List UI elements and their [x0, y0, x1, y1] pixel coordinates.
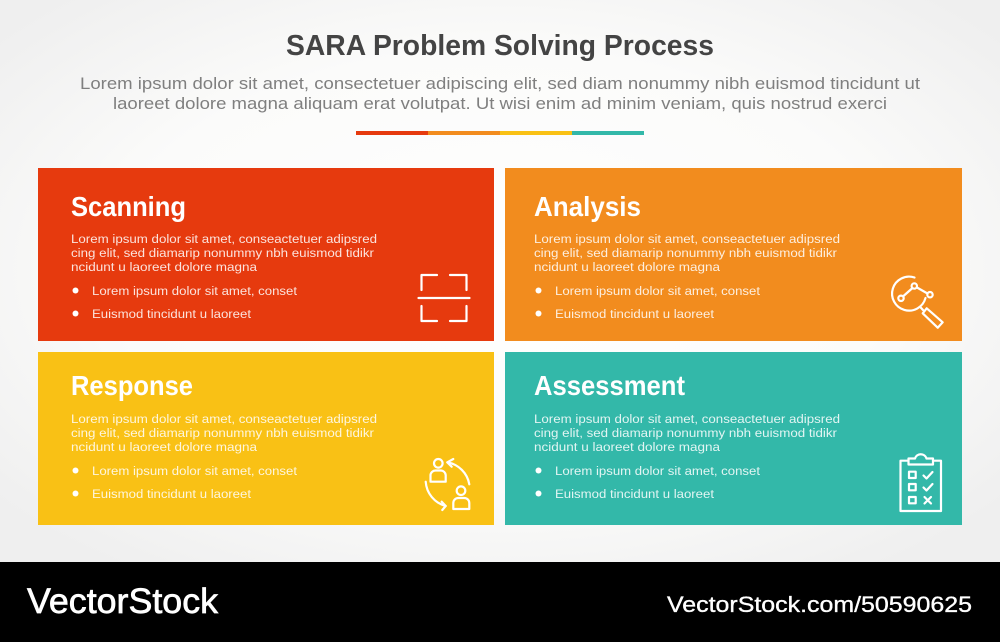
text block: Scanning description: ncidunt u laoreet dolore magna: [71, 260, 257, 274]
icon: magnifier with chart: [892, 277, 943, 328]
title: SARA Problem Solving Process: [286, 30, 714, 62]
bullet list: Scanning: [72, 284, 298, 321]
subtitle: laoreet dolore magna aliquam erat volutpat. Ut wisi enim ad minim veniam, quis nostrud exerci: [113, 95, 887, 113]
bullet list: Scanning: Euismod tincidunt u laoreet: [92, 307, 252, 321]
bullet list: Analysis: [536, 284, 761, 321]
text block: Assessment description: cing elit, sed diamarip nonummy nbh euismod tidikr: [534, 426, 837, 440]
bullet list: Scanning: Lorem ipsum dolor sit amet, conset: [92, 284, 298, 298]
panel: Analysis: [505, 168, 962, 341]
watermark id: VectorStock.com/50590625: [667, 592, 972, 617]
text block: Analysis description: Lorem ipsum dolor sit amet, conseactetuer adipsred: [534, 232, 840, 246]
icon: scan frame: [418, 275, 470, 321]
watermark logo: VectorStock: [27, 582, 219, 621]
heading: Response: Response: [71, 370, 193, 401]
text block: Scanning description: Lorem ipsum dolor sit amet, conseactetuer adipsred: [71, 232, 377, 246]
subtitle: [80, 75, 920, 113]
heading: Analysis: Analysis: [534, 191, 641, 222]
icon: people exchange cycle: [426, 459, 469, 510]
heading: Scanning: Scanning: [71, 191, 186, 222]
bullet list: Assessment: Lorem ipsum dolor sit amet, conset: [555, 464, 761, 478]
bullet list: Response: Lorem ipsum dolor sit amet, conset: [92, 464, 298, 478]
bullet list: Analysis: Lorem ipsum dolor sit amet, conset: [555, 284, 761, 298]
panel: Assessment: [505, 352, 962, 525]
text block: Analysis description: cing elit, sed diamarip nonummy nbh euismod tidikr: [534, 246, 837, 260]
bullet list: Assessment: Euismod tincidunt u laoreet: [555, 487, 715, 501]
text block: Assessment description: Lorem ipsum dolor sit amet, conseactetuer adipsred: [534, 412, 840, 426]
text block: Assessment description: ncidunt u laoreet dolore magna: [534, 440, 720, 454]
text block: Assessment description: [534, 412, 840, 454]
text block: Scanning description: cing elit, sed diamarip nonummy nbh euismod tidikr: [71, 246, 374, 260]
bullet list: Response: Euismod tincidunt u laoreet: [92, 487, 252, 501]
text block: Response description: ncidunt u laoreet dolore magna: [71, 440, 257, 454]
subtitle: Lorem ipsum dolor sit amet, consectetuer adipiscing elit, sed diam nonummy nibh euismod tincidunt ut: [80, 75, 920, 93]
text block: Response description: [71, 412, 377, 454]
heading: Assessment: Assessment: [534, 370, 685, 401]
footer bar: [0, 562, 1000, 642]
panel: Scanning: [38, 168, 494, 341]
text block: Scanning description: [71, 232, 377, 274]
bullet list: Analysis: Euismod tincidunt u laoreet: [555, 307, 715, 321]
icon: clipboard checklist: [900, 454, 941, 511]
text block: Analysis description: [534, 232, 840, 274]
bullet list: Assessment: [536, 464, 761, 501]
colour divider: [356, 131, 644, 135]
text block: Response description: Lorem ipsum dolor sit amet, conseactetuer adipsred: [71, 412, 377, 426]
text block: Response description: cing elit, sed diamarip nonummy nbh euismod tidikr: [71, 426, 374, 440]
bullet list: Response: [72, 464, 298, 501]
text block: Analysis description: ncidunt u laoreet dolore magna: [534, 260, 720, 274]
panel: Response: [38, 352, 494, 525]
